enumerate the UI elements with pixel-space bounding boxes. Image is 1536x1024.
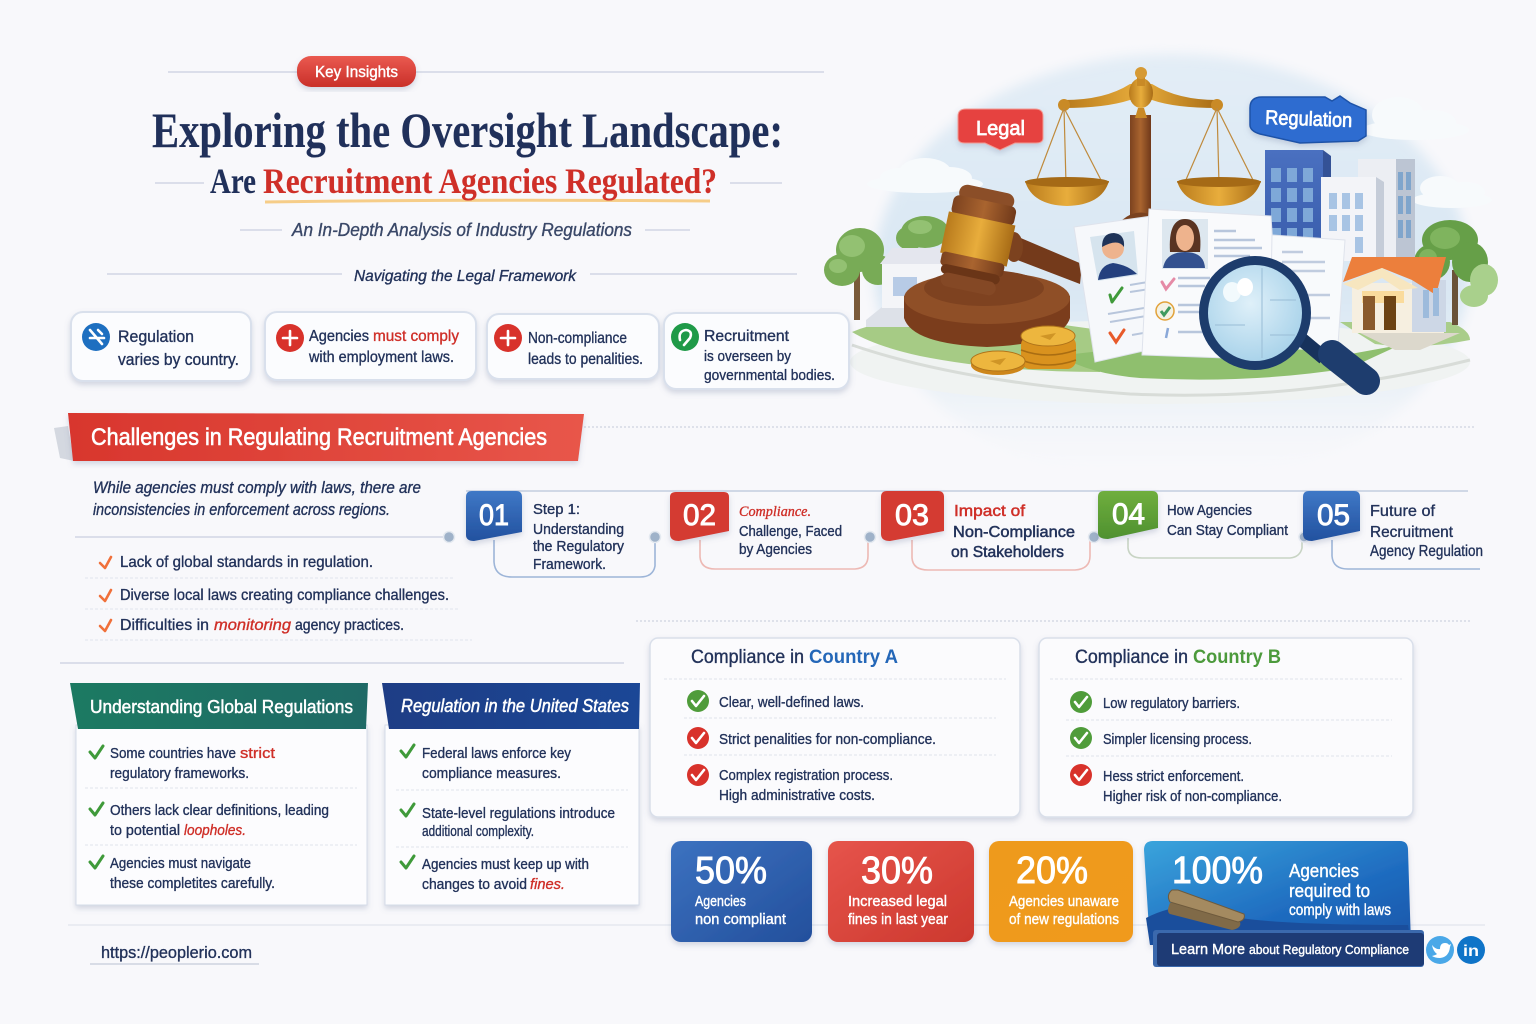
step 03: 03 bbox=[895, 499, 929, 532]
header badge: Key Insights bbox=[168, 56, 824, 87]
panel: Compliance in Country A: Compliance in bbox=[691, 647, 804, 668]
challenges intro: While agencies must comply with laws, there are bbox=[93, 478, 421, 497]
subtitle: An In-Depth Analysis of Industry Regulations bbox=[291, 220, 632, 240]
card: must comply: with employment laws. bbox=[308, 349, 454, 366]
step 03: on Stakeholders bbox=[951, 544, 1064, 561]
step 01: 01 bbox=[479, 499, 509, 532]
step 04 bbox=[1088, 491, 1302, 558]
stat: 100%: Agencies bbox=[1289, 861, 1359, 881]
resume: centre document bbox=[1142, 209, 1280, 360]
icon: twitter bbox=[1426, 936, 1454, 964]
tree right bbox=[1414, 220, 1498, 325]
card: must comply bbox=[265, 312, 476, 380]
button: Learn More: Learn More bbox=[1171, 941, 1245, 958]
panel: Regulation in the United States bbox=[382, 683, 640, 905]
stat: 100%: 100% bbox=[1172, 850, 1263, 892]
stat: 20%: 20% bbox=[1016, 850, 1088, 892]
illustration: legal scales, gavel, resumes and magnifier scene bbox=[824, 54, 1498, 486]
card: governmental bodies: Recruitment bbox=[704, 328, 790, 345]
resume: right document bbox=[1270, 235, 1345, 348]
stat: 100%: comply with laws bbox=[1289, 902, 1391, 919]
step 02: 02 bbox=[683, 499, 716, 532]
item: complex registration: High administrative costs. bbox=[719, 787, 875, 804]
icon: linkedin: in bbox=[1463, 943, 1479, 960]
item: less strict enforcement: Hess strict enforcement. bbox=[1103, 768, 1244, 785]
title: Exploring the Oversight Landscape: bbox=[152, 102, 783, 158]
item: strict penalties: Strict penalities for non-compliance. bbox=[719, 731, 936, 748]
step 01: Framework. bbox=[533, 556, 606, 573]
card: regulation varies bbox=[71, 312, 251, 381]
item: loopholes bbox=[90, 802, 329, 839]
stat: 100% bbox=[1144, 841, 1411, 945]
step 04: How Agencies bbox=[1167, 502, 1252, 519]
step 05: 05 bbox=[1317, 499, 1350, 532]
item: federal laws: Federal laws enforce key bbox=[422, 745, 571, 762]
item: monitoring: monitoring bbox=[214, 617, 291, 634]
card: governmental bodies: governmental bodies. bbox=[704, 367, 835, 384]
item: federal laws: compliance measures. bbox=[422, 765, 561, 782]
stat: 20% bbox=[989, 841, 1133, 942]
step 02: Compliance. bbox=[739, 504, 811, 520]
card: non-compliance: leads to penalities. bbox=[528, 351, 643, 368]
website link: https://peoplerio.com bbox=[101, 943, 252, 962]
step 03 bbox=[864, 491, 1090, 570]
item: complex registration: Complex registration process. bbox=[719, 767, 893, 784]
tag: Regulation bbox=[1250, 96, 1366, 143]
item: monitoring: Difficulties in bbox=[120, 617, 209, 634]
resume: left document bbox=[1074, 216, 1170, 362]
clouds bbox=[867, 97, 1492, 208]
section label: Navigating the Legal Framework: Navigating the Legal Framework bbox=[354, 268, 577, 285]
step 03: Impact of bbox=[954, 503, 1026, 520]
challenges banner bbox=[54, 413, 1476, 461]
stat: 20%: of new regulations bbox=[1009, 911, 1119, 928]
scales of justice bbox=[1025, 67, 1261, 220]
stat: 30%: 30% bbox=[861, 850, 933, 892]
challenges list bbox=[75, 537, 472, 640]
step 02: Challenge, Faced bbox=[739, 523, 842, 540]
item: changes: Agencies must keep up with bbox=[422, 856, 589, 873]
icon: linkedin bbox=[1457, 936, 1485, 964]
title: Are bbox=[210, 161, 256, 201]
item: loopholes: to potential bbox=[110, 822, 180, 839]
card: non-compliance: Non-compliance bbox=[528, 330, 627, 347]
item: low barriers: Low regulatory barriers. bbox=[1103, 695, 1240, 712]
stat: 100%: required to bbox=[1289, 881, 1370, 901]
step 04: 04 bbox=[1112, 498, 1145, 531]
item: global standards: Lack of global standards in regulation. bbox=[120, 554, 373, 571]
card: must comply: must comply bbox=[373, 328, 459, 345]
step 01: the Regulatory bbox=[533, 538, 624, 555]
step 03: Non-Compliance bbox=[953, 524, 1075, 541]
card: must comply: Agencies bbox=[309, 328, 369, 345]
card: non-compliance bbox=[487, 314, 659, 379]
button: Learn More bbox=[1153, 930, 1424, 967]
item: local laws: Diverse local laws creating compliance challenges. bbox=[120, 587, 449, 604]
stat: 50% bbox=[671, 841, 812, 942]
tag: Regulation: Regulation bbox=[1265, 107, 1353, 132]
step 01: Understanding bbox=[533, 521, 624, 538]
item: strict penalties bbox=[687, 727, 936, 749]
step 01 bbox=[444, 491, 655, 577]
card: regulation varies: Regulation bbox=[118, 327, 194, 346]
tag: Legal: Legal bbox=[976, 118, 1025, 140]
item: low barriers bbox=[1070, 691, 1240, 713]
card: governmental bodies: is overseen by bbox=[704, 348, 791, 365]
sky dome bbox=[874, 54, 1470, 486]
item: loopholes: Others lack clear definitions, leading bbox=[110, 802, 329, 819]
magnifying glass bbox=[1199, 256, 1366, 381]
item: state-level bbox=[401, 804, 615, 840]
stat: 30% bbox=[828, 841, 974, 942]
step timeline bbox=[444, 491, 1483, 577]
icon: gavel handle bars bbox=[1168, 890, 1244, 930]
building: tall grey tower bbox=[1358, 159, 1415, 260]
stat: 50%: 50% bbox=[695, 850, 767, 892]
tag: Legal bbox=[958, 109, 1043, 150]
stat: 30%: Increased legal bbox=[848, 893, 947, 910]
panel: Understanding Global Regulations: Understanding Global Regulations bbox=[90, 697, 353, 717]
challenges intro: inconsistencies in enforcement across regions. bbox=[93, 500, 390, 519]
gavel bbox=[904, 182, 1082, 347]
item: changes: changes to avoid bbox=[422, 876, 527, 893]
step 02 bbox=[650, 492, 868, 569]
item: navigate: Agencies must navigate bbox=[110, 855, 251, 872]
step 05: Future of bbox=[1370, 503, 1436, 520]
panel: Compliance in Country A bbox=[650, 638, 1020, 817]
item: state-level: State-level regulations introduce bbox=[422, 805, 615, 822]
tree left bbox=[824, 216, 949, 320]
item: monitoring: agency practices. bbox=[295, 617, 404, 634]
panel: Regulation in the United States: Regulation in the United States bbox=[401, 696, 629, 716]
panel: Compliance in Country B bbox=[1039, 638, 1413, 817]
item: clear laws bbox=[687, 690, 864, 712]
item: complex registration bbox=[687, 764, 893, 804]
item: strict frameworks: strict bbox=[240, 745, 276, 762]
key fact cards bbox=[71, 312, 849, 389]
item: federal laws bbox=[401, 745, 571, 782]
panel: Compliance in Country B: Compliance in bbox=[1075, 647, 1188, 668]
item: changes bbox=[401, 856, 589, 893]
item: changes: fines. bbox=[530, 876, 565, 893]
item: less strict enforcement: Higher risk of non-compliance. bbox=[1103, 788, 1282, 805]
stat: 50%: non compliant bbox=[695, 911, 787, 928]
building: left white house bbox=[866, 248, 950, 327]
panel: Compliance in Country B: Country B bbox=[1193, 647, 1281, 668]
card: regulation varies: varies by country. bbox=[118, 350, 239, 369]
building: white office bbox=[1321, 177, 1384, 261]
item: strict frameworks: Some countries have bbox=[110, 745, 236, 762]
item: simpler licensing: Simpler licensing process. bbox=[1103, 731, 1252, 748]
item: simpler licensing bbox=[1070, 727, 1252, 749]
item: strict frameworks bbox=[90, 745, 276, 782]
challenges intro bbox=[93, 478, 421, 519]
item: clear laws: Clear, well-defined laws. bbox=[719, 694, 864, 711]
item: monitoring bbox=[100, 617, 404, 634]
button: Learn More: about Regulatory Compliance bbox=[1249, 942, 1409, 957]
item: loopholes: loopholes. bbox=[184, 822, 246, 839]
ground bbox=[850, 320, 1470, 404]
panel: Compliance in Country A: Country A bbox=[809, 647, 898, 668]
step 04: Can Stay Compliant bbox=[1167, 522, 1289, 539]
item: state-level: additional complexity. bbox=[422, 823, 534, 840]
item: strict frameworks: regulatory frameworks. bbox=[110, 765, 249, 782]
panel: Understanding Global Regulations bbox=[70, 683, 368, 905]
stat: 30%: fines in last year bbox=[848, 911, 948, 928]
challenges banner: Challenges in Regulating Recruitment Agencies bbox=[91, 424, 547, 451]
header badge: Key Insights: Key Insights bbox=[315, 64, 398, 81]
stat: 20%: Agencies unaware bbox=[1009, 893, 1119, 910]
coins bbox=[971, 326, 1076, 375]
step 05 bbox=[1299, 491, 1483, 569]
step 05: Recruitment bbox=[1370, 524, 1454, 541]
step 01: Step 1: bbox=[533, 501, 580, 518]
card: governmental bodies bbox=[664, 313, 849, 389]
item: navigate: these completites carefully. bbox=[110, 875, 275, 892]
title: Recruitment Agencies Regulated? bbox=[263, 161, 717, 201]
item: less strict enforcement bbox=[1070, 764, 1282, 805]
title bbox=[152, 102, 783, 202]
item: navigate bbox=[90, 855, 275, 892]
stat: 50%: Agencies bbox=[695, 893, 746, 910]
step 02: by Agencies bbox=[739, 541, 812, 558]
step 05: Agency Regulation bbox=[1370, 543, 1483, 560]
building: orange-roof house bbox=[1343, 257, 1460, 350]
building: blue tower bbox=[1265, 150, 1331, 242]
